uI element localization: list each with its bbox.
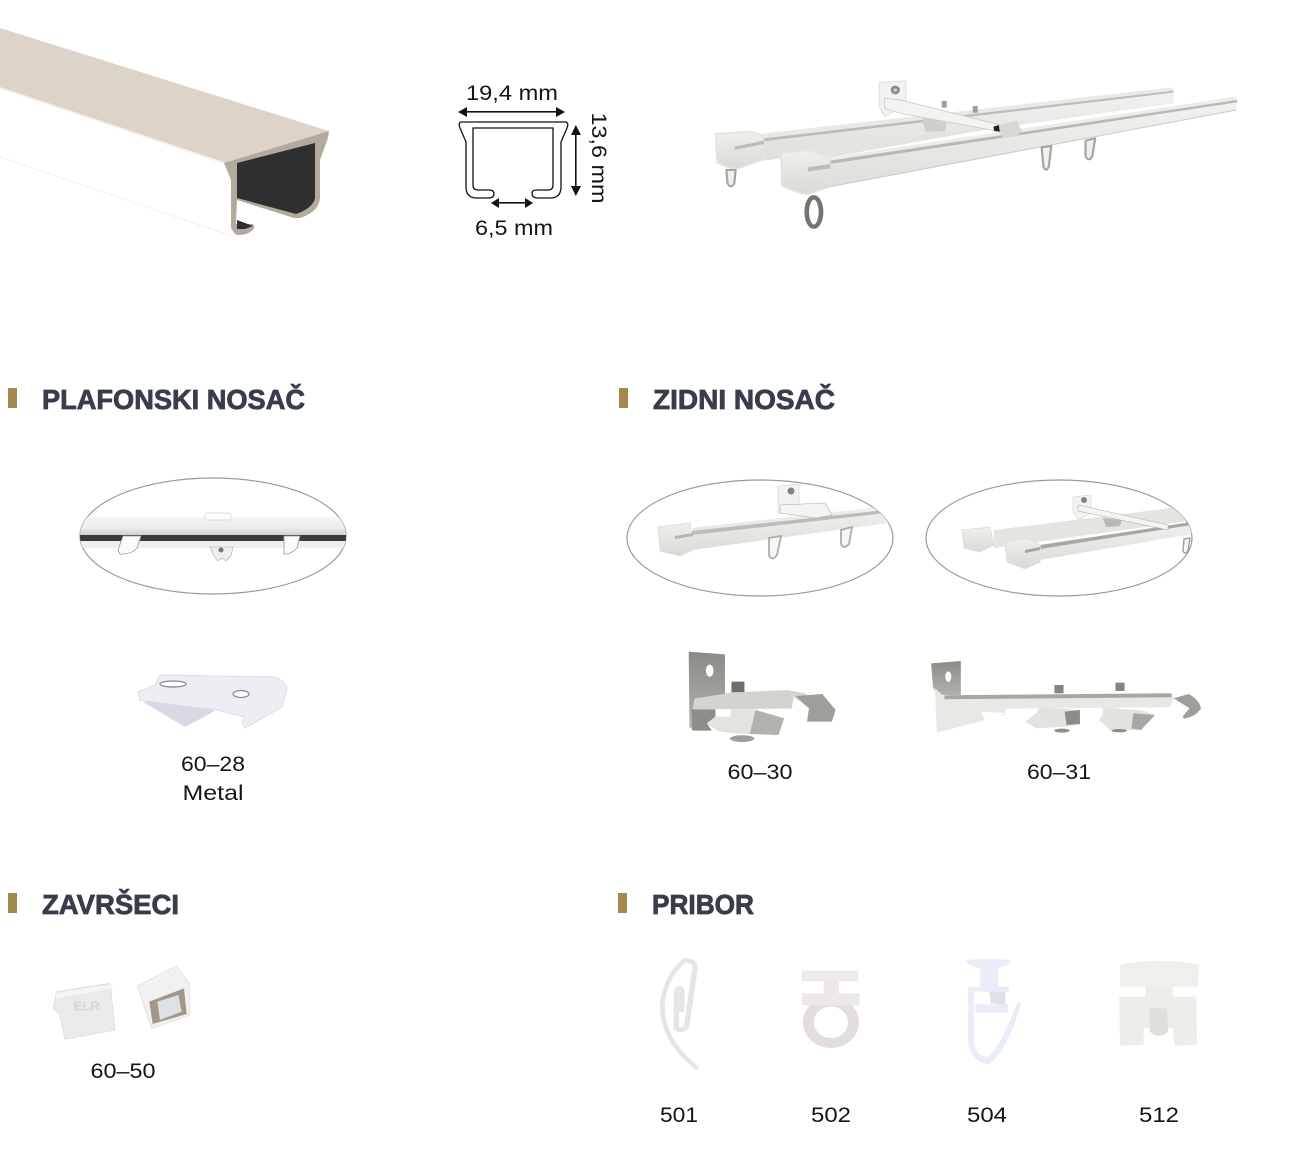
label 504: 504 (967, 1104, 1007, 1127)
hook 504 (965, 959, 1021, 1064)
section marker (618, 893, 627, 913)
mounting bracket (879, 81, 1022, 138)
width label: 19,4 mm (466, 82, 558, 105)
bracket 60-31 (931, 661, 1201, 733)
end caps 60-50 (53, 966, 190, 1039)
label 501: 501 (660, 1104, 698, 1127)
label 60-31: 60–31 (1027, 761, 1091, 784)
bracket 60-30 (689, 652, 836, 742)
opening arrow (491, 198, 533, 208)
section marker (619, 388, 628, 408)
heading: pribor: PRIBOR (652, 889, 754, 920)
section marker (8, 893, 17, 913)
rail profile 3D render (0, 28, 329, 236)
heading: plafonski nosač: PLAFONSKI NOSAČ (42, 383, 305, 415)
double rail product render (716, 81, 1237, 227)
glider hooks (726, 138, 1095, 186)
opening label: 6,5 mm (475, 217, 553, 240)
label 60-50: 60–50 (90, 1060, 156, 1083)
glider 502 (802, 971, 859, 1043)
label 502: 502 (811, 1104, 851, 1127)
width arrow (458, 107, 565, 117)
rail cross-section dimension diagram (458, 82, 610, 240)
ceiling mount oval (78, 478, 348, 594)
heading: završeci: ZAVRŠECI (42, 888, 179, 920)
bracket 60-28 (138, 675, 287, 728)
wall mount double oval (926, 480, 1198, 596)
height label: 13,6 mm (587, 112, 610, 204)
section marker (8, 388, 17, 408)
label 512: 512 (1139, 1104, 1179, 1127)
profile outline (459, 122, 568, 198)
label metal: Metal (182, 782, 244, 805)
label 60-28: 60–28 (181, 753, 245, 776)
hook 501 (662, 960, 696, 1068)
height arrow (571, 125, 581, 196)
heading: zidni nosač: ZIDNI NOSAČ (653, 383, 835, 415)
eye ring (807, 197, 821, 227)
glider 512 (1119, 961, 1199, 1046)
end caps (716, 131, 830, 194)
end caps 60-50: ELR (73, 999, 100, 1014)
wall mount single oval (627, 480, 895, 596)
label 60-30: 60–30 (728, 761, 792, 784)
